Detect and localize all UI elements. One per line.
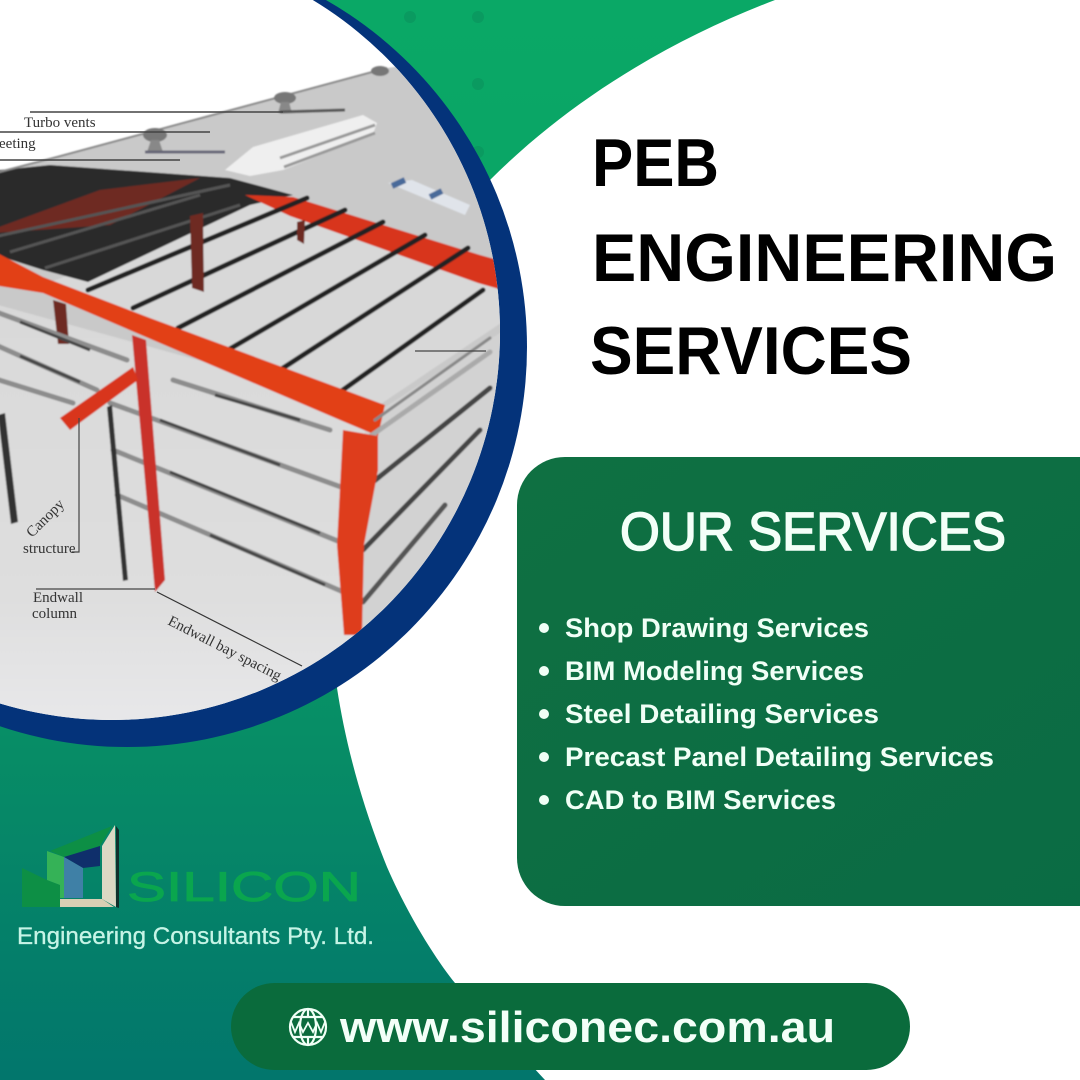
- roof opening panel: [54, 203, 500, 404]
- turbo vents: [143, 66, 389, 152]
- diagram labels: Endwall: [33, 590, 83, 606]
- title: [590, 125, 1057, 389]
- interior posts: [53, 213, 305, 344]
- roof surface: [0, 60, 520, 410]
- diagram labels: column: [32, 606, 77, 622]
- roof purlins: [88, 198, 483, 397]
- title: SERVICES: [590, 313, 912, 389]
- services list: CAD to BIM Services: [565, 785, 836, 815]
- logo tagline: Engineering Consultants Pty. Ltd.: [17, 923, 374, 950]
- panel: our services: [517, 457, 1080, 906]
- front rafter: [0, 244, 385, 436]
- ridge vent: [225, 115, 377, 176]
- website address: www.siliconec.com.au: [339, 1003, 835, 1052]
- main column: [337, 430, 378, 635]
- side wall: [362, 334, 500, 628]
- panel heading: OUR SERVICES: [620, 502, 1006, 562]
- services list: Steel Detailing Services: [565, 699, 879, 729]
- endwall column: [132, 335, 165, 592]
- diagram labels: Turbo vents: [24, 115, 96, 131]
- green background shape: [0, 0, 775, 1080]
- website pill: [231, 983, 910, 1070]
- icon: globe: [290, 1009, 326, 1045]
- services list: Shop Drawing Services: [565, 613, 869, 643]
- floor and front wall backdrop: [0, 305, 366, 720]
- logo icon: [22, 825, 119, 908]
- decorative dots: [404, 11, 484, 158]
- photo: PEB steel building diagram: [0, 0, 520, 740]
- services list: Precast Panel Detailing Services: [565, 742, 994, 772]
- diagram labels: Endwall bay spacing: [165, 613, 284, 685]
- diagram labels: structure: [23, 541, 76, 557]
- front wall girts: [0, 306, 363, 600]
- canopy arm: [60, 367, 138, 430]
- ridge line: [0, 68, 387, 177]
- services list: BIM Modeling Services: [565, 656, 864, 686]
- title: PEB: [592, 125, 719, 201]
- services list: [539, 613, 994, 815]
- back rafter: [244, 194, 498, 290]
- logo wordmark: SILICON: [127, 863, 361, 910]
- dark purlin bundle: [0, 165, 293, 282]
- diagram labels: eeting: [0, 136, 36, 152]
- navy ring: [0, 0, 527, 747]
- diagram labels: Canopy: [24, 496, 68, 541]
- side wall girts: [363, 338, 490, 602]
- diagram labels: [0, 112, 486, 685]
- skylight patches: [388, 180, 470, 215]
- logo: Silicon Engineering Consultants: [17, 825, 374, 950]
- black posts: [107, 405, 128, 581]
- title: ENGINEERING: [592, 220, 1057, 296]
